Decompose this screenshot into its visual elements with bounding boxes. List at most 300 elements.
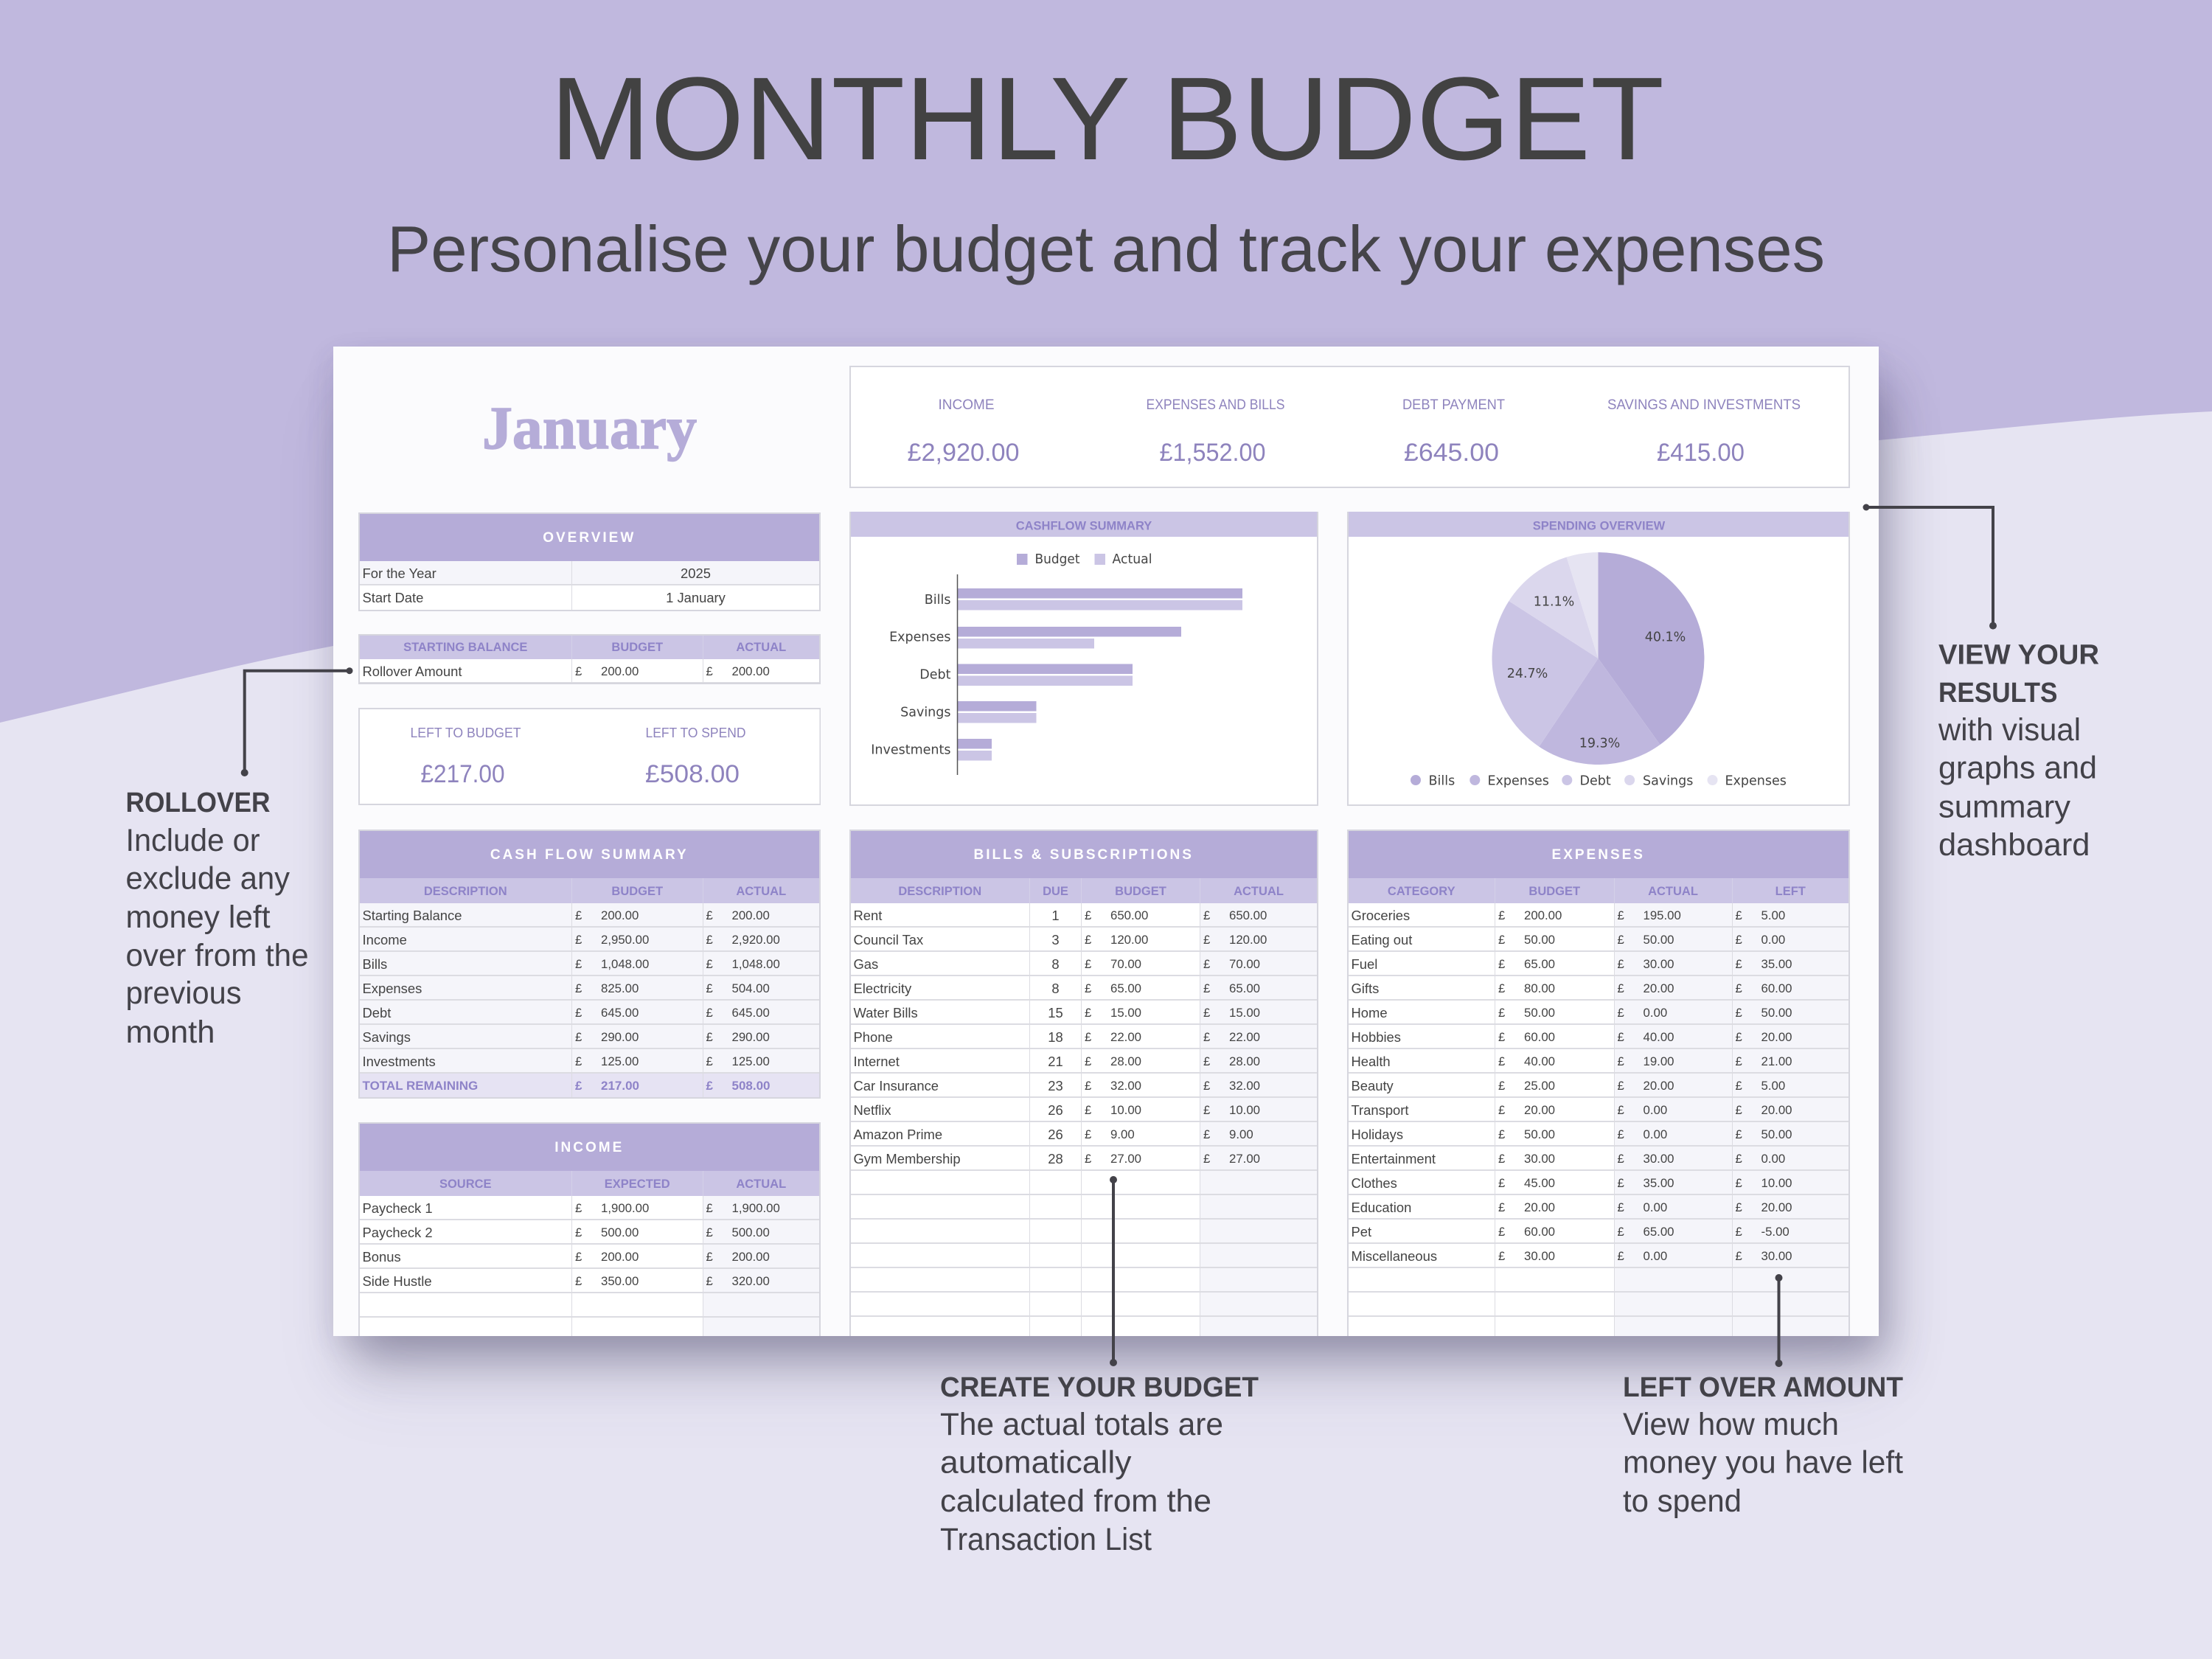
pie legend: Debt bbox=[1579, 774, 1610, 789]
panel: overview: OVERVIEW bbox=[543, 530, 636, 546]
arrow: left over amount connector bbox=[1775, 1274, 1783, 1367]
callout: rollover: Include or bbox=[125, 823, 260, 858]
panel: bills and subscriptions table: 23 bbox=[1048, 1078, 1063, 1093]
panel: cash flow summary table: 217.00 bbox=[601, 1079, 639, 1093]
panel: expenses table: Transport bbox=[1351, 1102, 1409, 1118]
KPI: income: INCOME bbox=[938, 397, 994, 413]
callout: create your budget: calculated from the bbox=[940, 1484, 1211, 1519]
panel: bills and subscriptions table: 28 bbox=[1048, 1151, 1063, 1166]
panel: bills and subscriptions table: £ bbox=[1203, 1030, 1210, 1044]
panel: expenses table bbox=[1346, 830, 1850, 1336]
panel: expenses table: Education bbox=[1351, 1200, 1411, 1215]
panel: expenses table: £ bbox=[1618, 1054, 1624, 1068]
panel: cash flow summary table: £ bbox=[575, 1079, 582, 1093]
panel: cash flow summary table: Starting Balance bbox=[363, 908, 462, 923]
bar chart: Savings bbox=[900, 705, 950, 720]
callout: rollover: previous bbox=[125, 975, 242, 1011]
panel: cash flow summary table: 2,950.00 bbox=[601, 933, 649, 947]
KPI: left to budget: £217.00 bbox=[420, 760, 504, 788]
panel: bills and subscriptions table: Water Bills bbox=[854, 1005, 918, 1020]
KPI: left to budget bbox=[410, 726, 521, 788]
panel: expenses table: 21.00 bbox=[1761, 1054, 1792, 1068]
panel: bills and subscriptions table: £ bbox=[1085, 1152, 1091, 1166]
panel: cash flow summary table: £ bbox=[575, 933, 582, 947]
panel: bills and subscriptions table: ACTUAL bbox=[1234, 885, 1284, 898]
panel: bills and subscriptions table: 15 bbox=[1048, 1005, 1063, 1020]
panel: income table: £ bbox=[575, 1250, 582, 1264]
panel: cash flow summary table: Expenses bbox=[363, 981, 422, 996]
panel: expenses table: 10.00 bbox=[1761, 1176, 1792, 1190]
panel: expenses table: £ bbox=[1498, 1054, 1505, 1068]
panel: expenses table: 5.00 bbox=[1761, 1079, 1785, 1093]
panel: starting balance bbox=[358, 634, 821, 684]
panel: bills and subscriptions table: 650.00 bbox=[1110, 908, 1148, 922]
panel: expenses table: 0.00 bbox=[1643, 1103, 1667, 1117]
panel: cash flow summary table: Bills bbox=[363, 956, 387, 972]
pie chart: 19.3% bbox=[1579, 736, 1620, 751]
panel: expenses table: Miscellaneous bbox=[1351, 1248, 1437, 1264]
arrow: create your budget connector bbox=[1110, 1176, 1117, 1366]
panel: bills and subscriptions table: 8 bbox=[1051, 956, 1060, 972]
panel: income table: £ bbox=[706, 1250, 713, 1264]
panel: bills and subscriptions table: Amazon Prime bbox=[854, 1127, 942, 1142]
panel: bills and subscriptions table: £ bbox=[1203, 1006, 1210, 1020]
panel: bills and subscriptions table: 21 bbox=[1048, 1054, 1063, 1069]
panel: cash flow summary table: £ bbox=[706, 957, 713, 971]
panel: expenses table: £ bbox=[1618, 957, 1624, 971]
panel: bills and subscriptions table: Netflix bbox=[854, 1102, 891, 1118]
panel: bills and subscriptions table: 28.00 bbox=[1110, 1054, 1141, 1068]
panel: income table: 320.00 bbox=[731, 1274, 770, 1288]
panel: bills and subscriptions table: £ bbox=[1203, 1079, 1210, 1093]
panel: bills and subscriptions table: Phone bbox=[854, 1029, 893, 1045]
panel: expenses table: £ bbox=[1618, 1176, 1624, 1190]
panel: cash flow summary table: DESCRIPTION bbox=[424, 885, 507, 898]
panel: cash flow summary table: 508.00 bbox=[731, 1079, 770, 1093]
panel: income table: £ bbox=[575, 1225, 582, 1239]
callout: rollover bbox=[125, 787, 308, 1050]
arrow: rollover connector bbox=[241, 667, 352, 776]
panel: cash flow summary table: £ bbox=[706, 981, 713, 995]
chart heading: SPENDING OVERVIEW bbox=[1532, 519, 1665, 532]
panel: expenses table: 200.00 bbox=[1524, 908, 1562, 922]
panel: bills and subscriptions table: Car Insurance bbox=[854, 1078, 939, 1093]
panel: expenses table: Holidays bbox=[1351, 1127, 1403, 1142]
panel: bills and subscriptions table: DUE bbox=[1043, 885, 1068, 898]
panel: bills and subscriptions table: Council Tax bbox=[854, 932, 923, 947]
KPI: savings and investments: SAVINGS AND INVESTMENTS bbox=[1607, 397, 1801, 413]
panel: expenses table: EXPENSES bbox=[1552, 847, 1645, 863]
panel: expenses table: £ bbox=[1618, 1006, 1624, 1020]
panel: income table: 1,900.00 bbox=[731, 1201, 780, 1215]
panel: bills and subscriptions table: 9.00 bbox=[1110, 1127, 1135, 1141]
panel: bills and subscriptions table: Internet bbox=[854, 1054, 900, 1069]
pie chart: 11.1% bbox=[1533, 594, 1574, 609]
pie legend bbox=[1410, 774, 1786, 789]
panel: expenses table: £ bbox=[1736, 957, 1742, 971]
panel: expenses table: £ bbox=[1736, 1127, 1742, 1141]
panel: bills and subscriptions table: 26 bbox=[1048, 1127, 1063, 1142]
panel: bills and subscriptions table: 32.00 bbox=[1110, 1079, 1141, 1093]
panel: bills and subscriptions table: 15.00 bbox=[1229, 1006, 1260, 1020]
panel: bills and subscriptions table: £ bbox=[1085, 933, 1091, 947]
panel: cash flow summary table: £ bbox=[575, 908, 582, 922]
panel: bills and subscriptions table: 8 bbox=[1051, 981, 1060, 996]
panel: expenses table: 30.00 bbox=[1761, 1249, 1792, 1263]
panel: bills and subscriptions table: £ bbox=[1085, 1103, 1091, 1117]
callout: rollover: money left bbox=[125, 900, 271, 935]
panel: bills and subscriptions table: £ bbox=[1085, 1079, 1091, 1093]
panel: expenses table: 50.00 bbox=[1524, 933, 1555, 947]
callout: left over amount: to spend bbox=[1623, 1484, 1742, 1519]
panel: bills and subscriptions table: Rent bbox=[854, 908, 882, 923]
KPI: debt payment: £645.00 bbox=[1404, 439, 1498, 467]
panel: expenses table: 60.00 bbox=[1761, 981, 1792, 995]
panel: cash flow summary table: 290.00 bbox=[731, 1030, 770, 1044]
panel: income table: £ bbox=[575, 1274, 582, 1288]
panel: cash flow summary table: Debt bbox=[363, 1005, 391, 1020]
KPI: left to budget: LEFT TO BUDGET bbox=[410, 726, 521, 740]
KPI: left to spend: LEFT TO SPEND bbox=[645, 726, 745, 740]
callout: rollover: month bbox=[125, 1015, 215, 1050]
panel: expenses table: 45.00 bbox=[1524, 1176, 1555, 1190]
panel: expenses table: £ bbox=[1618, 1225, 1624, 1239]
panel: income table: £ bbox=[706, 1201, 713, 1215]
panel: expenses table: Eating out bbox=[1351, 932, 1412, 947]
panel: expenses table: 20.00 bbox=[1761, 1103, 1792, 1117]
panel: expenses table: 20.00 bbox=[1524, 1103, 1555, 1117]
panel: cash flow summary table: £ bbox=[575, 981, 582, 995]
panel: expenses table: £ bbox=[1498, 1152, 1505, 1166]
panel: expenses table: £ bbox=[1618, 1249, 1624, 1263]
panel: starting balance: Rollover Amount bbox=[363, 664, 462, 679]
panel: starting balance: £ bbox=[706, 664, 713, 678]
panel: income table: ACTUAL bbox=[736, 1178, 786, 1191]
panel: expenses table: 40.00 bbox=[1524, 1054, 1555, 1068]
panel: bills and subscriptions table: 120.00 bbox=[1110, 933, 1148, 947]
KPI: expenses and bills bbox=[1146, 397, 1284, 467]
panel: income table: SOURCE bbox=[439, 1178, 492, 1191]
panel: expenses table: £ bbox=[1618, 981, 1624, 995]
callout: rollover: over from the bbox=[125, 938, 308, 973]
panel: expenses table: £ bbox=[1618, 1030, 1624, 1044]
panel: expenses table: 65.00 bbox=[1643, 1225, 1674, 1239]
panel: expenses table: £ bbox=[1498, 933, 1505, 947]
panel: expenses table: 0.00 bbox=[1643, 1006, 1667, 1020]
panel: bills and subscriptions table: 32.00 bbox=[1229, 1079, 1260, 1093]
panel: income table: Paycheck 2 bbox=[363, 1225, 433, 1240]
panel: income table: EXPECTED bbox=[605, 1178, 670, 1191]
panel: expenses table: £ bbox=[1736, 1030, 1742, 1044]
panel: expenses table: £ bbox=[1736, 1176, 1742, 1190]
panel: cash flow summary table: Investments bbox=[363, 1054, 436, 1069]
panel: cash flow summary table: 200.00 bbox=[731, 908, 770, 922]
panel: income table bbox=[358, 1122, 821, 1336]
panel: expenses table: Pet bbox=[1351, 1224, 1371, 1239]
panel: starting balance: £ bbox=[575, 664, 582, 678]
panel: expenses table: £ bbox=[1736, 1249, 1742, 1263]
panel: bills and subscriptions table: BUDGET bbox=[1115, 885, 1166, 898]
panel: expenses table: £ bbox=[1498, 957, 1505, 971]
panel: starting balance: ACTUAL bbox=[736, 641, 786, 654]
panel: expenses table: Hobbies bbox=[1351, 1029, 1401, 1045]
pie chart: 24.7% bbox=[1506, 667, 1548, 681]
panel: expenses table: 30.00 bbox=[1643, 957, 1674, 971]
panel: cash flow summary table: 125.00 bbox=[731, 1054, 770, 1068]
panel: cash flow summary table: TOTAL REMAINING bbox=[363, 1079, 478, 1093]
KPI: expenses and bills: EXPENSES AND BILLS bbox=[1146, 397, 1284, 413]
panel: cash flow summary table: 645.00 bbox=[601, 1006, 639, 1020]
panel: bills and subscriptions table: 9.00 bbox=[1229, 1127, 1253, 1141]
pie legend: Bills bbox=[1428, 774, 1455, 789]
panel: cash flow summary table: £ bbox=[706, 1079, 713, 1093]
panel: income table: 500.00 bbox=[601, 1225, 639, 1239]
panel: bills and subscriptions table: 70.00 bbox=[1229, 957, 1260, 971]
callout: left over amount: money you have left bbox=[1623, 1445, 1903, 1481]
panel: expenses table: Clothes bbox=[1351, 1175, 1397, 1191]
panel: overview: 1 January bbox=[666, 590, 726, 605]
panel: bills and subscriptions table: 27.00 bbox=[1110, 1152, 1141, 1166]
panel: bills and subscriptions table: £ bbox=[1085, 1127, 1091, 1141]
panel: bills and subscriptions table: £ bbox=[1203, 1103, 1210, 1117]
panel: expenses table: 35.00 bbox=[1761, 957, 1792, 971]
panel: expenses table: 20.00 bbox=[1761, 1030, 1792, 1044]
panel: starting balance: 200.00 bbox=[731, 664, 770, 678]
panel: bills and subscriptions table: 120.00 bbox=[1229, 933, 1267, 947]
panel: expenses table: 195.00 bbox=[1643, 908, 1681, 922]
callout: rollover: exclude any bbox=[125, 861, 290, 897]
panel: expenses table: 40.00 bbox=[1643, 1030, 1674, 1044]
panel: income table: Side Hustle bbox=[363, 1273, 432, 1289]
panel: expenses table: £ bbox=[1618, 908, 1624, 922]
panel: bills and subscriptions table: Electricity bbox=[854, 981, 911, 996]
panel: expenses table: Health bbox=[1351, 1054, 1391, 1069]
panel: expenses table: £ bbox=[1498, 1006, 1505, 1020]
panel: expenses table: £ bbox=[1618, 1127, 1624, 1141]
panel: expenses table: BUDGET bbox=[1528, 885, 1580, 898]
chart heading: CASHFLOW SUMMARY bbox=[1015, 519, 1152, 532]
panel: expenses table: 50.00 bbox=[1643, 933, 1674, 947]
bar chart: Investments bbox=[871, 743, 950, 758]
panel: expenses table: 80.00 bbox=[1524, 981, 1555, 995]
panel: bills and subscriptions table: £ bbox=[1085, 1030, 1091, 1044]
pie legend: Expenses bbox=[1725, 774, 1786, 789]
panel: expenses table: £ bbox=[1618, 1079, 1624, 1093]
panel: bills and subscriptions table: £ bbox=[1203, 1152, 1210, 1166]
panel: cash flow summary table: 1,048.00 bbox=[601, 957, 649, 971]
panel: expenses table: 25.00 bbox=[1524, 1079, 1555, 1093]
callout: create your budget: CREATE YOUR BUDGET bbox=[940, 1372, 1259, 1403]
panel: cash flow summary table: BUDGET bbox=[611, 885, 663, 898]
panel: bills and subscriptions table: 15.00 bbox=[1110, 1006, 1141, 1020]
panel: bills and subscriptions table: £ bbox=[1085, 981, 1091, 995]
panel: expenses table: 0.00 bbox=[1643, 1249, 1667, 1263]
panel: expenses table: 20.00 bbox=[1524, 1200, 1555, 1214]
panel: expenses table: £ bbox=[1736, 981, 1742, 995]
panel: bills and subscriptions table: Gym Membership bbox=[854, 1151, 961, 1166]
callout: view your results: summary bbox=[1938, 789, 2070, 824]
subtitle: Personalise your budget and track your expenses bbox=[387, 212, 1825, 285]
panel: expenses table: 30.00 bbox=[1524, 1152, 1555, 1166]
panel: bills and subscriptions table: 1 bbox=[1051, 908, 1060, 923]
chart legend: Actual bbox=[1112, 552, 1152, 567]
panel: expenses table: 50.00 bbox=[1761, 1127, 1792, 1141]
panel: cash flow summary table: £ bbox=[706, 933, 713, 947]
chart legend bbox=[1016, 552, 1152, 567]
panel: cash flow summary table: £ bbox=[706, 1054, 713, 1068]
panel: overview: Start Date bbox=[363, 590, 423, 605]
panel: expenses table: £ bbox=[1498, 1103, 1505, 1117]
panel: bills and subscriptions table: 65.00 bbox=[1229, 981, 1260, 995]
panel: bills and subscriptions table: £ bbox=[1085, 957, 1091, 971]
panel: expenses table: £ bbox=[1498, 1249, 1505, 1263]
panel: cash flow summary table: 125.00 bbox=[601, 1054, 639, 1068]
panel: bills and subscriptions table: £ bbox=[1085, 908, 1091, 922]
panel: expenses table: Beauty bbox=[1351, 1078, 1394, 1093]
panel: expenses table: 60.00 bbox=[1524, 1225, 1555, 1239]
panel: overview: For the Year bbox=[363, 566, 437, 581]
panel: expenses table: £ bbox=[1618, 1200, 1624, 1214]
panel: income table: £ bbox=[706, 1225, 713, 1239]
panel: cash flow summary table: 645.00 bbox=[731, 1006, 770, 1020]
panel: cash flow summary table: 2,920.00 bbox=[731, 933, 780, 947]
KPI: left to spend bbox=[644, 726, 745, 788]
panel: bills and subscriptions table: £ bbox=[1085, 1006, 1091, 1020]
bar chart: Expenses bbox=[889, 630, 950, 644]
panel: bills and subscriptions table: £ bbox=[1203, 981, 1210, 995]
panel: expenses table: 50.00 bbox=[1524, 1127, 1555, 1141]
panel: income table: INCOME bbox=[554, 1140, 624, 1155]
panel: cash flow summary table: 290.00 bbox=[601, 1030, 639, 1044]
month heading: January bbox=[482, 394, 697, 462]
panel: KPI summary bbox=[849, 366, 1850, 488]
callout: view your results bbox=[1938, 640, 2099, 863]
panel: bills and subscriptions table: 22.00 bbox=[1229, 1030, 1260, 1044]
panel: expenses table: 0.00 bbox=[1761, 1152, 1785, 1166]
panel: expenses table: £ bbox=[1736, 1225, 1742, 1239]
panel: bills and subscriptions table: 26 bbox=[1048, 1102, 1063, 1118]
panel: expenses table: CATEGORY bbox=[1388, 885, 1455, 898]
panel: expenses table: £ bbox=[1736, 1079, 1742, 1093]
panel: expenses table: £ bbox=[1498, 1200, 1505, 1214]
panel: expenses table: Fuel bbox=[1351, 956, 1377, 972]
panel: income table: £ bbox=[575, 1201, 582, 1215]
chart legend: Budget bbox=[1034, 552, 1079, 567]
callout: view your results: RESULTS bbox=[1938, 678, 2057, 709]
panel: cash flow summary table: £ bbox=[706, 908, 713, 922]
panel: expenses table: £ bbox=[1736, 908, 1742, 922]
panel: cash flow summary table: £ bbox=[575, 1054, 582, 1068]
panel: expenses table: LEFT bbox=[1775, 885, 1806, 898]
callout: create your budget: Transaction List bbox=[940, 1522, 1152, 1557]
panel: expenses table: £ bbox=[1498, 908, 1505, 922]
arrow: view results connector bbox=[1863, 504, 1997, 630]
panel: expenses table: 30.00 bbox=[1524, 1249, 1555, 1263]
panel: bills and subscriptions table: £ bbox=[1203, 933, 1210, 947]
panel: expenses table: £ bbox=[1736, 933, 1742, 947]
panel: spending overview chart bbox=[1347, 512, 1850, 806]
panel: bills and subscriptions table: £ bbox=[1203, 957, 1210, 971]
pie legend: Expenses bbox=[1487, 774, 1548, 789]
panel: expenses table: Home bbox=[1351, 1005, 1388, 1020]
panel: expenses table: 50.00 bbox=[1524, 1006, 1555, 1020]
panel: cash flow summary table: £ bbox=[706, 1006, 713, 1020]
panel: cash flow summary table: 1,048.00 bbox=[731, 957, 780, 971]
panel: expenses table: 30.00 bbox=[1643, 1152, 1674, 1166]
KPI: debt payment bbox=[1402, 397, 1505, 467]
panel: cash flow summary table: 504.00 bbox=[731, 981, 770, 995]
panel: expenses table: £ bbox=[1618, 933, 1624, 947]
panel: income table: 200.00 bbox=[601, 1250, 639, 1264]
panel: bills and subscriptions table: Gas bbox=[854, 956, 878, 972]
callout: create your budget: The actual totals are bbox=[940, 1407, 1223, 1442]
panel: cash flow summary table: 200.00 bbox=[601, 908, 639, 922]
callout: view your results: dashboard bbox=[1938, 827, 2090, 863]
panel: bills and subscriptions table: 650.00 bbox=[1229, 908, 1267, 922]
panel: expenses table: Entertainment bbox=[1351, 1151, 1436, 1166]
panel: expenses table: £ bbox=[1498, 1176, 1505, 1190]
panel: bills and subscriptions table: £ bbox=[1203, 1054, 1210, 1068]
panel: income table: 200.00 bbox=[731, 1250, 770, 1264]
panel: expenses table: 0.00 bbox=[1761, 933, 1785, 947]
callout: create your budget bbox=[940, 1372, 1259, 1557]
panel: bills and subscriptions table: 3 bbox=[1051, 932, 1060, 947]
panel: cash flow summary table: £ bbox=[706, 1030, 713, 1044]
bar chart: Debt bbox=[919, 668, 950, 683]
panel: bills and subscriptions table: 65.00 bbox=[1110, 981, 1141, 995]
panel: cash flow summary table: £ bbox=[575, 957, 582, 971]
callout: view your results: with visual bbox=[1938, 712, 2081, 748]
panel: expenses table: £ bbox=[1736, 1054, 1742, 1068]
panel: income table: 350.00 bbox=[601, 1274, 639, 1288]
panel: left to budget and spend bbox=[358, 708, 821, 805]
KPI: expenses and bills: £1,552.00 bbox=[1159, 439, 1265, 467]
callout: left over amount bbox=[1623, 1372, 1903, 1519]
panel: cash flow summary table: Savings bbox=[363, 1029, 411, 1045]
panel: cash flow summary table: ACTUAL bbox=[736, 885, 786, 898]
panel: expenses table: 60.00 bbox=[1524, 1030, 1555, 1044]
bar chart: Bills bbox=[924, 593, 950, 608]
panel: expenses table: 0.00 bbox=[1643, 1127, 1667, 1141]
panel: expenses table: 20.00 bbox=[1761, 1200, 1792, 1214]
panel: income table: 500.00 bbox=[731, 1225, 770, 1239]
panel: expenses table: -5.00 bbox=[1761, 1225, 1790, 1239]
panel: expenses table: £ bbox=[1498, 1127, 1505, 1141]
callout: view your results: VIEW YOUR bbox=[1938, 640, 2099, 671]
panel: expenses table: £ bbox=[1736, 1152, 1742, 1166]
panel: bills and subscriptions table: 70.00 bbox=[1110, 957, 1141, 971]
panel: bills and subscriptions table: 18 bbox=[1048, 1029, 1063, 1045]
panel: bills and subscriptions table: £ bbox=[1203, 908, 1210, 922]
panel: expenses table: ACTUAL bbox=[1648, 885, 1698, 898]
KPI: debt payment: DEBT PAYMENT bbox=[1402, 397, 1505, 413]
panel: cash flow summary table: £ bbox=[575, 1030, 582, 1044]
panel: income table: 1,900.00 bbox=[601, 1201, 649, 1215]
panel: income table: £ bbox=[706, 1274, 713, 1288]
panel: expenses table: £ bbox=[1736, 1200, 1742, 1214]
panel: expenses table: £ bbox=[1736, 1006, 1742, 1020]
KPI: income bbox=[907, 397, 1019, 467]
panel: expenses table: £ bbox=[1618, 1152, 1624, 1166]
panel: expenses table: £ bbox=[1618, 1103, 1624, 1117]
KPI: savings and investments: £415.00 bbox=[1656, 439, 1745, 467]
title: MONTHLY BUDGET bbox=[550, 52, 1664, 184]
panel: cash flow summary table: 825.00 bbox=[601, 981, 639, 995]
panel: expenses table: £ bbox=[1736, 1103, 1742, 1117]
panel: bills and subscriptions table: DESCRIPTION bbox=[898, 885, 981, 898]
callout: left over amount: View how much bbox=[1623, 1407, 1839, 1442]
panel: expenses table: 20.00 bbox=[1643, 981, 1674, 995]
